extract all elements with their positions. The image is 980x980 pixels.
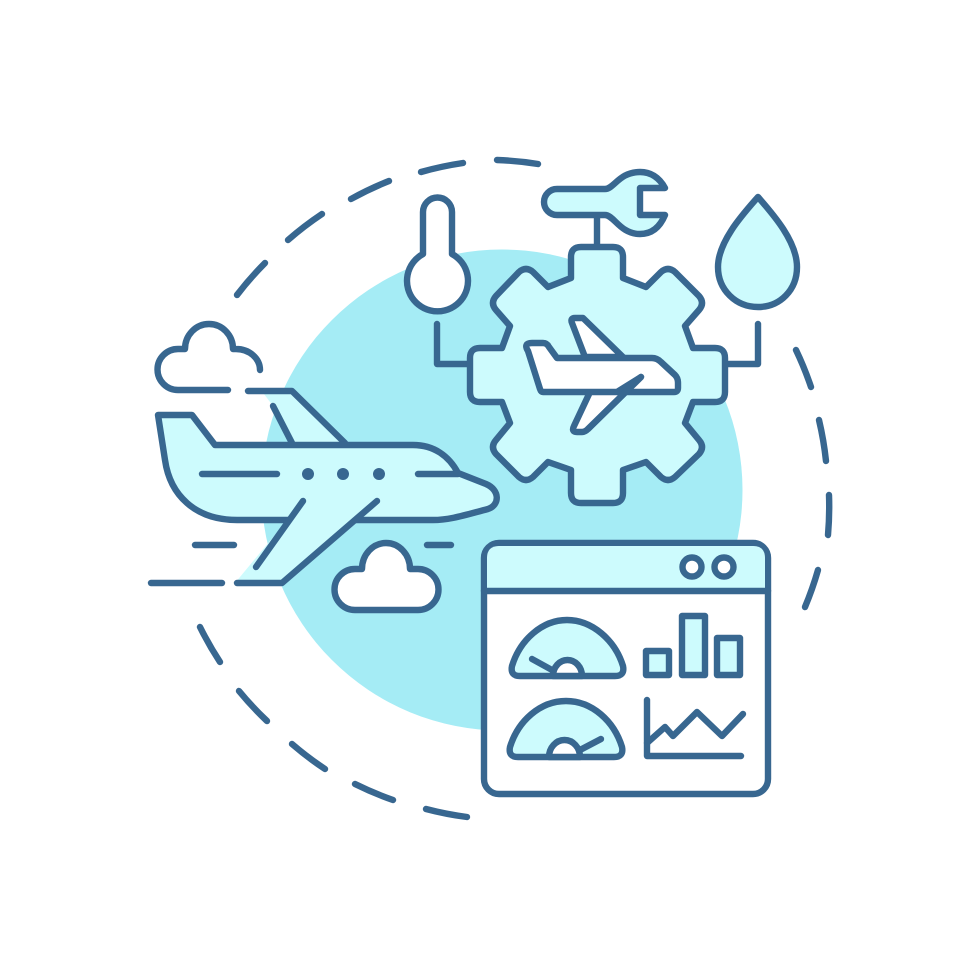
connector left: [437, 324, 468, 364]
icon: cloud lower: [334, 543, 438, 610]
gear plane: [526, 318, 678, 432]
panel: dashboard window: [484, 543, 768, 794]
icon: airplane: [158, 391, 497, 583]
bar chart: [646, 616, 740, 675]
window buttons: [682, 558, 702, 576]
fuselage stripes and windows: [202, 471, 277, 477]
icon: water drop: [718, 197, 797, 307]
icon: thermometer: [407, 198, 468, 311]
dashed ring: [200, 160, 829, 817]
gauge bottom: [510, 701, 622, 757]
gauge top: [512, 620, 623, 676]
fuselage: [158, 415, 497, 520]
lower wing: [235, 501, 377, 583]
speed lines: [151, 545, 451, 583]
icon: wrench: [544, 172, 665, 247]
icon: gear: [470, 247, 725, 503]
background circle: [262, 250, 742, 730]
icon: cloud upper left: [157, 324, 260, 390]
title bar: [487, 546, 765, 588]
window frame: [484, 543, 768, 794]
upper wing: [264, 394, 345, 443]
line chart: [647, 700, 743, 756]
connector right: [725, 324, 758, 364]
